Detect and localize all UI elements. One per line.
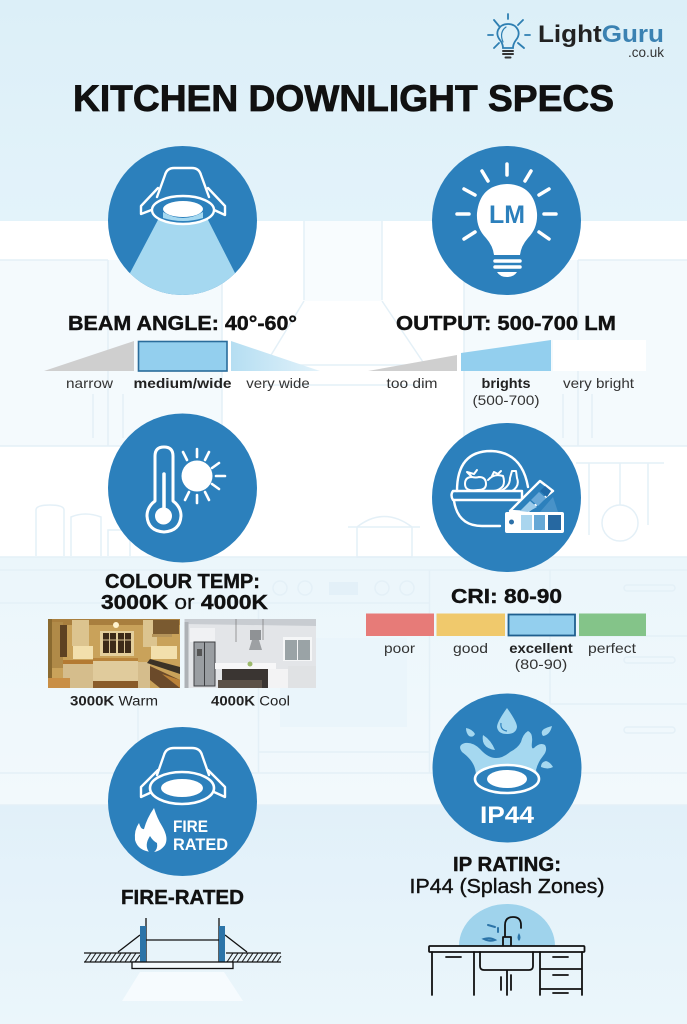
scale: output: [368, 340, 646, 371]
heading: IP rating: IP RATING:: [453, 854, 561, 876]
label: brights: brights: [482, 375, 531, 391]
subheading: IP44 splash zones: IP44 (Splash Zones): [410, 876, 604, 898]
title: KITCHEN DOWNLIGHT SPECS: [73, 77, 614, 119]
diagram: ceiling cross-section: [84, 918, 281, 1001]
logo wordmark: LightGuru: [538, 21, 664, 48]
icon: fire rated downlight: FIRE: [173, 817, 208, 836]
panel: fire rated: [84, 727, 281, 1001]
photo: warm kitchen: [48, 619, 180, 688]
label: narrow: narrow: [66, 375, 114, 391]
label: too dim: too dim: [386, 375, 438, 391]
icon: logo bulb: [488, 14, 530, 58]
photo: cool kitchen: [184, 619, 316, 688]
icon: fruit basket and swatches: [432, 423, 581, 572]
label: perfect: perfect: [588, 640, 636, 656]
icon: downlight beam: [108, 146, 257, 300]
caption: 3000K warm: 3000K Warm: [70, 694, 158, 708]
logo: [488, 14, 664, 60]
label: very bright: very bright: [563, 375, 634, 391]
scale: beam angle: [44, 341, 320, 371]
heading: output: OUTPUT: 500-700 LM: [396, 313, 616, 335]
heading: colour temp: COLOUR TEMP:: [105, 571, 260, 593]
icon: fire rated downlight: [108, 727, 257, 876]
panel: beam angle: [44, 146, 320, 391]
label: poor: poor: [384, 640, 415, 656]
icon: thermometer and sun: [108, 414, 257, 562]
label: 500-700: (500-700): [472, 392, 540, 408]
scale: CRI: [366, 614, 646, 636]
label: 80-90: (80-90): [515, 656, 567, 672]
heading: CRI: CRI: 80-90: [451, 586, 562, 608]
icon: LM bulb: LM: [489, 201, 525, 229]
logo domain: .co.uk: [628, 45, 664, 60]
icon: LM bulb: [432, 146, 581, 295]
icon: IP44 splash: IP44: [480, 802, 534, 829]
panel: colour temperature: [48, 414, 316, 708]
caption: 4000K cool: 4000K Cool: [211, 694, 290, 708]
label: medium/wide: medium/wide: [134, 375, 232, 391]
panel: IP rating: [410, 694, 604, 995]
icon: IP44 splash: [432, 694, 582, 842]
icon: fire rated downlight: RATED: [173, 835, 228, 854]
panel: CRI: [366, 423, 646, 672]
label: very wide: very wide: [246, 375, 310, 391]
label: good: good: [453, 640, 488, 656]
heading: fire-rated: FIRE-RATED: [121, 887, 244, 909]
heading: beam angle: BEAM ANGLE: 40°-60°: [68, 313, 297, 335]
heading: 3000K or 4000K: 3000K or 4000K: [101, 592, 269, 614]
label: excellent: excellent: [509, 640, 573, 656]
diagram: kitchen sink: [429, 904, 584, 995]
panel: output: [368, 146, 646, 408]
